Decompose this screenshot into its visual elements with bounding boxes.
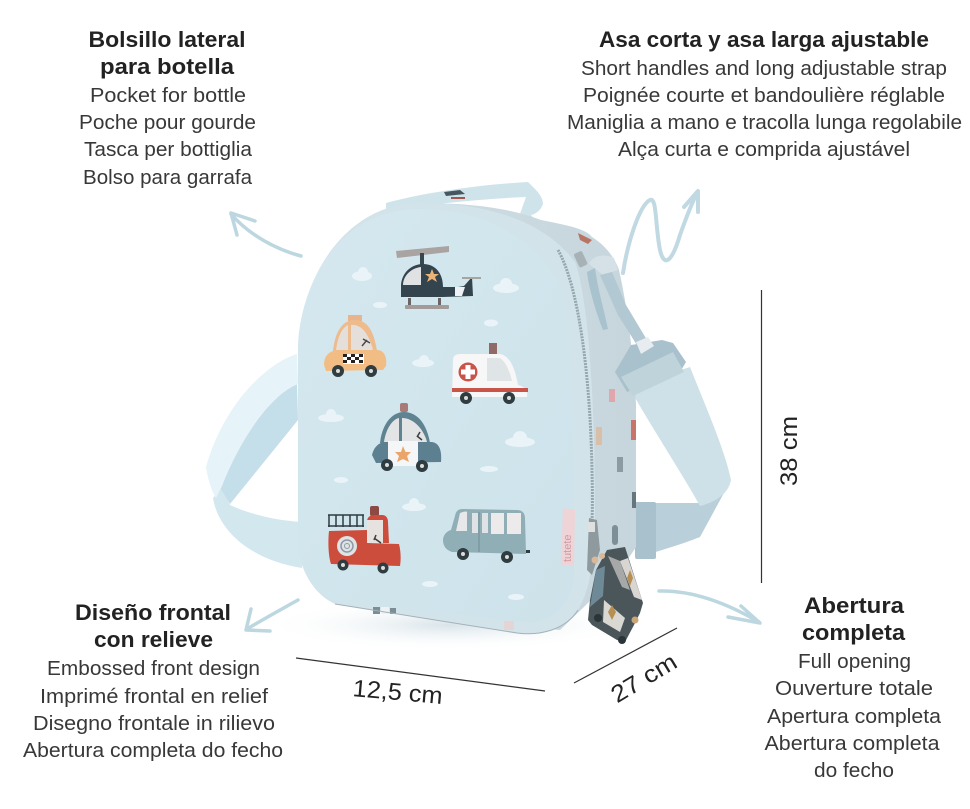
heading block: bottle pocket <box>79 27 256 189</box>
ambulance <box>452 343 528 404</box>
ground shadow <box>260 599 640 651</box>
fire truck <box>328 506 401 574</box>
heading block: embossed front <box>23 600 283 762</box>
handle print <box>444 190 465 199</box>
police car <box>372 403 441 472</box>
heading block: handles and strap <box>567 27 962 161</box>
zipper gusset <box>298 203 595 634</box>
heading block: embossed front: Abertura completa do fecho <box>23 740 283 762</box>
heading block: bottle pocket: para botella <box>100 54 235 79</box>
heading block: full opening: Apertura completa <box>767 706 942 728</box>
top handle <box>386 182 543 222</box>
heading block: full opening: Ouverture totale <box>775 678 933 700</box>
heading block: embossed front: Diseño frontal <box>75 600 231 625</box>
heading block: embossed front: Disegno frontale in rilievo <box>33 713 275 735</box>
bag front panel <box>298 209 574 622</box>
arrow: to bottle pocket <box>231 213 301 256</box>
heading block: bottle pocket: Bolsillo lateral <box>88 27 246 52</box>
heading block: handles and strap: Poignée courte et bandoulière réglable <box>583 85 945 107</box>
zipper pull and police car charm <box>587 518 643 644</box>
bottom zipper pulls <box>335 604 578 634</box>
dimension: depth 27 cm: 27 cm <box>606 648 682 709</box>
heading block: embossed front: Imprimé frontal en relief <box>40 686 268 708</box>
taxi <box>324 315 386 377</box>
brand tag <box>561 508 575 565</box>
side panel print <box>573 233 636 545</box>
heading block: bottle pocket: Pocket for bottle <box>90 85 246 107</box>
helicopter <box>396 246 481 309</box>
lunch bag illustration <box>206 182 731 651</box>
heading block: handles and strap: Alça curta e comprida ajustável <box>618 139 910 161</box>
strap clip and buckle <box>587 256 686 396</box>
heading block: full opening <box>764 593 942 782</box>
dimension: width 12,5 cm <box>296 658 545 710</box>
heading block: full opening: Abertura <box>804 593 905 618</box>
heading block: handles and strap: Maniglia a mano e tracolla lunga regolabile <box>567 112 962 134</box>
shoulder strap, left loop <box>206 354 302 568</box>
heading block: bottle pocket: Poche pour gourde <box>79 112 256 134</box>
brand tag: tutete <box>562 534 574 562</box>
dimension: width 12,5 cm: 12,5 cm <box>352 675 444 710</box>
arrow: to handles <box>623 191 698 273</box>
heading block: handles and strap: Asa corta y asa larga ajustable <box>599 27 929 52</box>
dimension: height 38 cm: 38 cm <box>776 416 803 486</box>
clouds <box>318 267 535 600</box>
heading block: embossed front: Embossed front design <box>47 658 260 680</box>
zipper line <box>558 250 592 560</box>
heading block: handles and strap: Short handles and long adjustable strap <box>581 58 947 80</box>
heading block: full opening: Abertura completa <box>764 733 940 755</box>
heading block: full opening: do fecho <box>814 760 894 782</box>
shoulder strap, right loop <box>629 367 731 559</box>
heading block: full opening: Full opening <box>798 651 911 673</box>
heading block: embossed front: con relieve <box>94 627 213 652</box>
arrow: to full opening <box>659 591 760 623</box>
dimension: depth 27 cm <box>574 628 682 709</box>
bus <box>443 509 530 563</box>
heading block: full opening: completa <box>802 620 906 645</box>
heading block: bottle pocket: Tasca per bottiglia <box>84 139 253 161</box>
bag side panel <box>400 203 636 630</box>
heading block: bottle pocket: Bolso para garrafa <box>83 167 253 189</box>
arrow: to embossed front <box>246 600 298 631</box>
